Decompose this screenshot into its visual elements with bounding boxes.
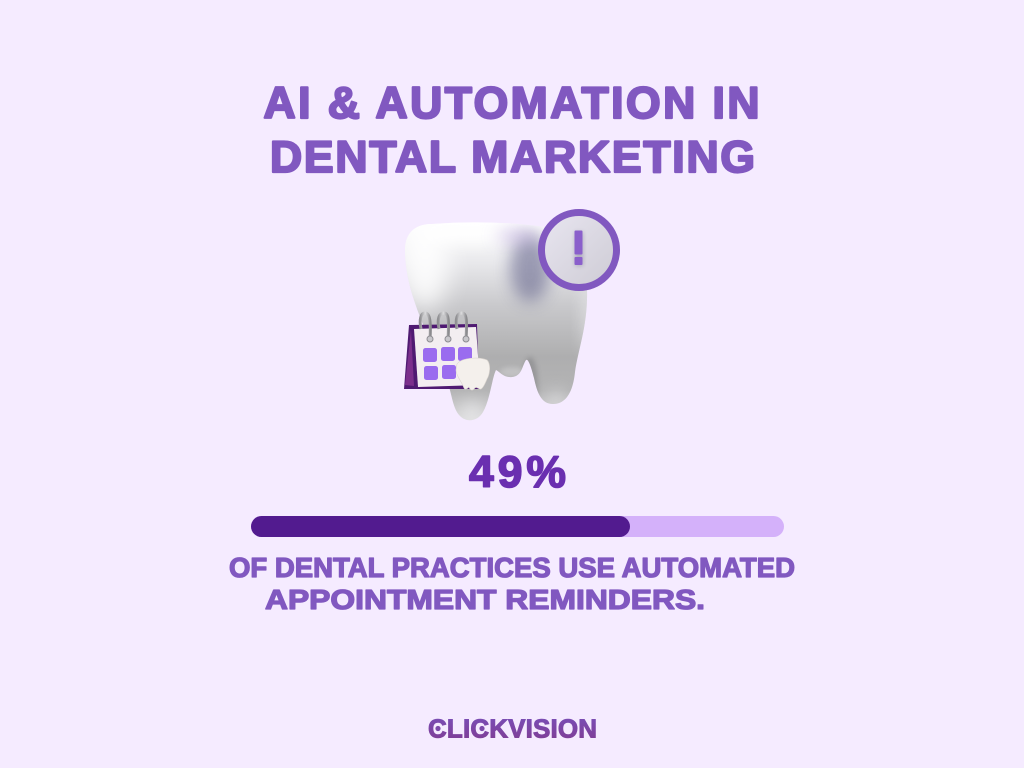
icon: tooth <box>405 222 587 420</box>
icon: alert badge <box>542 212 616 288</box>
logo: ClickVision: CLICKVISION <box>428 714 597 744</box>
icon: calendar <box>404 313 490 390</box>
description text: OF DENTAL PRACTICES USE AUTOMATED <box>229 552 795 583</box>
progress bar <box>251 516 784 537</box>
illustration: tooth with alert badge and calendar <box>401 212 616 428</box>
description text <box>229 552 795 615</box>
statistic: 49%: 49% <box>469 448 566 497</box>
title <box>264 79 760 182</box>
icon: small tooth <box>456 358 490 390</box>
description text: APPOINTMENT REMINDERS. <box>265 584 705 615</box>
title: AI & AUTOMATION IN <box>264 79 760 128</box>
title: DENTAL MARKETING <box>270 133 755 182</box>
